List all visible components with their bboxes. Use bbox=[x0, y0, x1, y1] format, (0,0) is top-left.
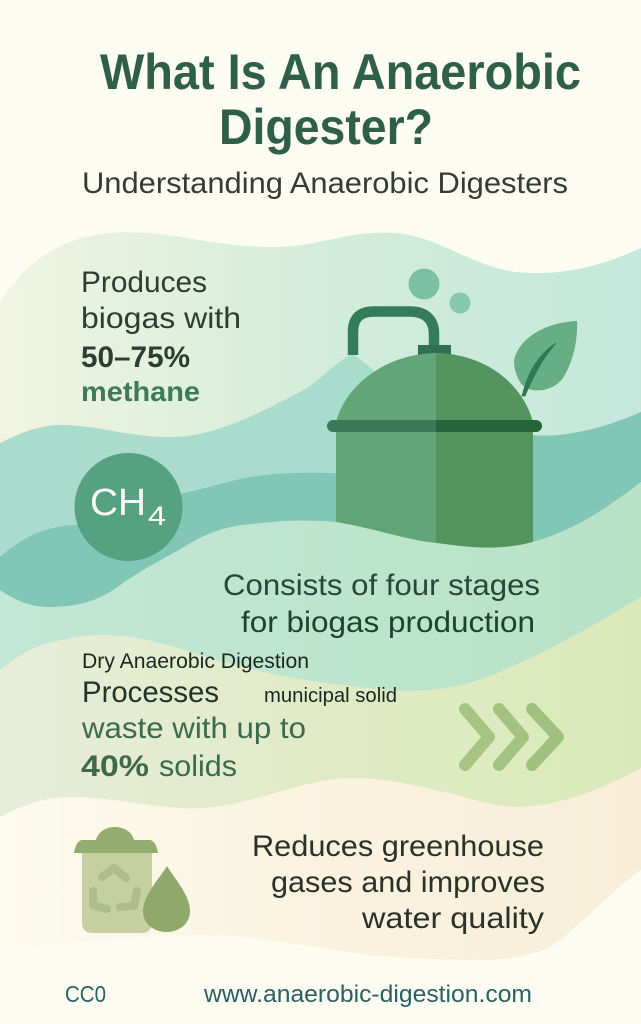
wave: yellow green bbox=[0, 597, 641, 835]
icon: chevron arrows bbox=[465, 709, 558, 765]
title: Digester? bbox=[219, 99, 433, 155]
dome left bbox=[336, 353, 436, 422]
wave: light green bbox=[0, 482, 641, 800]
footer: license: CC0 bbox=[65, 981, 106, 1007]
title bbox=[100, 44, 581, 155]
tank body left bbox=[336, 430, 436, 560]
text block: biogas methane: methane bbox=[81, 376, 200, 407]
wave: pale mint bbox=[0, 232, 641, 700]
nozzle bbox=[418, 345, 451, 355]
text block: dry anaerobic digestion: waste with up to bbox=[81, 712, 306, 745]
wave: cream peach bbox=[0, 768, 641, 960]
icon: CH4 circle: CH bbox=[90, 482, 146, 524]
text block: dry anaerobic digestion: Dry Anaerobic Digestion bbox=[82, 650, 309, 673]
text block: dry anaerobic digestion bbox=[81, 650, 397, 783]
icon: CH4 circle: 4 bbox=[148, 501, 166, 531]
text block: reduces greenhouse gases bbox=[252, 830, 545, 935]
recycle symbol bbox=[93, 868, 137, 909]
icon: recycling bin and water drop bbox=[74, 827, 190, 933]
text block: dry anaerobic digestion: Processes bbox=[82, 676, 219, 709]
title: What Is An Anaerobic bbox=[100, 44, 581, 100]
text block: dry anaerobic digestion: solids bbox=[159, 750, 237, 783]
icon: bubbles bbox=[408, 268, 470, 314]
water drop bbox=[143, 866, 190, 932]
wave: medium teal with hill bbox=[0, 354, 440, 700]
gas pipe bbox=[353, 312, 434, 355]
text block: biogas methane bbox=[81, 266, 241, 407]
band right bbox=[436, 420, 542, 432]
wave: dark teal bbox=[0, 412, 641, 720]
icon: CH4 circle bbox=[74, 453, 182, 561]
digester tank bbox=[327, 312, 542, 560]
text block: biogas methane: 50–75% bbox=[81, 341, 190, 374]
subtitle: Understanding Anaerobic Digesters bbox=[82, 167, 568, 200]
icon: leaf bbox=[514, 321, 577, 396]
text block: four stages: for biogas production bbox=[241, 606, 535, 639]
text block: dry anaerobic digestion: 40% bbox=[81, 750, 149, 783]
dome right bbox=[436, 353, 533, 422]
text block: reduces greenhouse gases: Reduces greenhouse bbox=[252, 830, 544, 863]
footer: website: www.anaerobic-digestion.com bbox=[203, 981, 532, 1008]
text block: biogas methane: Produces bbox=[81, 266, 207, 299]
bin body bbox=[82, 853, 152, 933]
text block: reduces greenhouse gases: water quality bbox=[361, 902, 544, 935]
text block: dry anaerobic digestion: municipal solid bbox=[264, 685, 397, 707]
tank body right bbox=[436, 430, 533, 560]
text block: biogas methane: biogas with bbox=[81, 302, 241, 335]
text block: reduces greenhouse gases: gases and improves bbox=[271, 866, 545, 899]
text block: four stages: Consists of four stages bbox=[223, 569, 540, 602]
bin lid bbox=[74, 827, 158, 853]
text block: four stages bbox=[223, 569, 540, 639]
band left bbox=[327, 420, 436, 432]
